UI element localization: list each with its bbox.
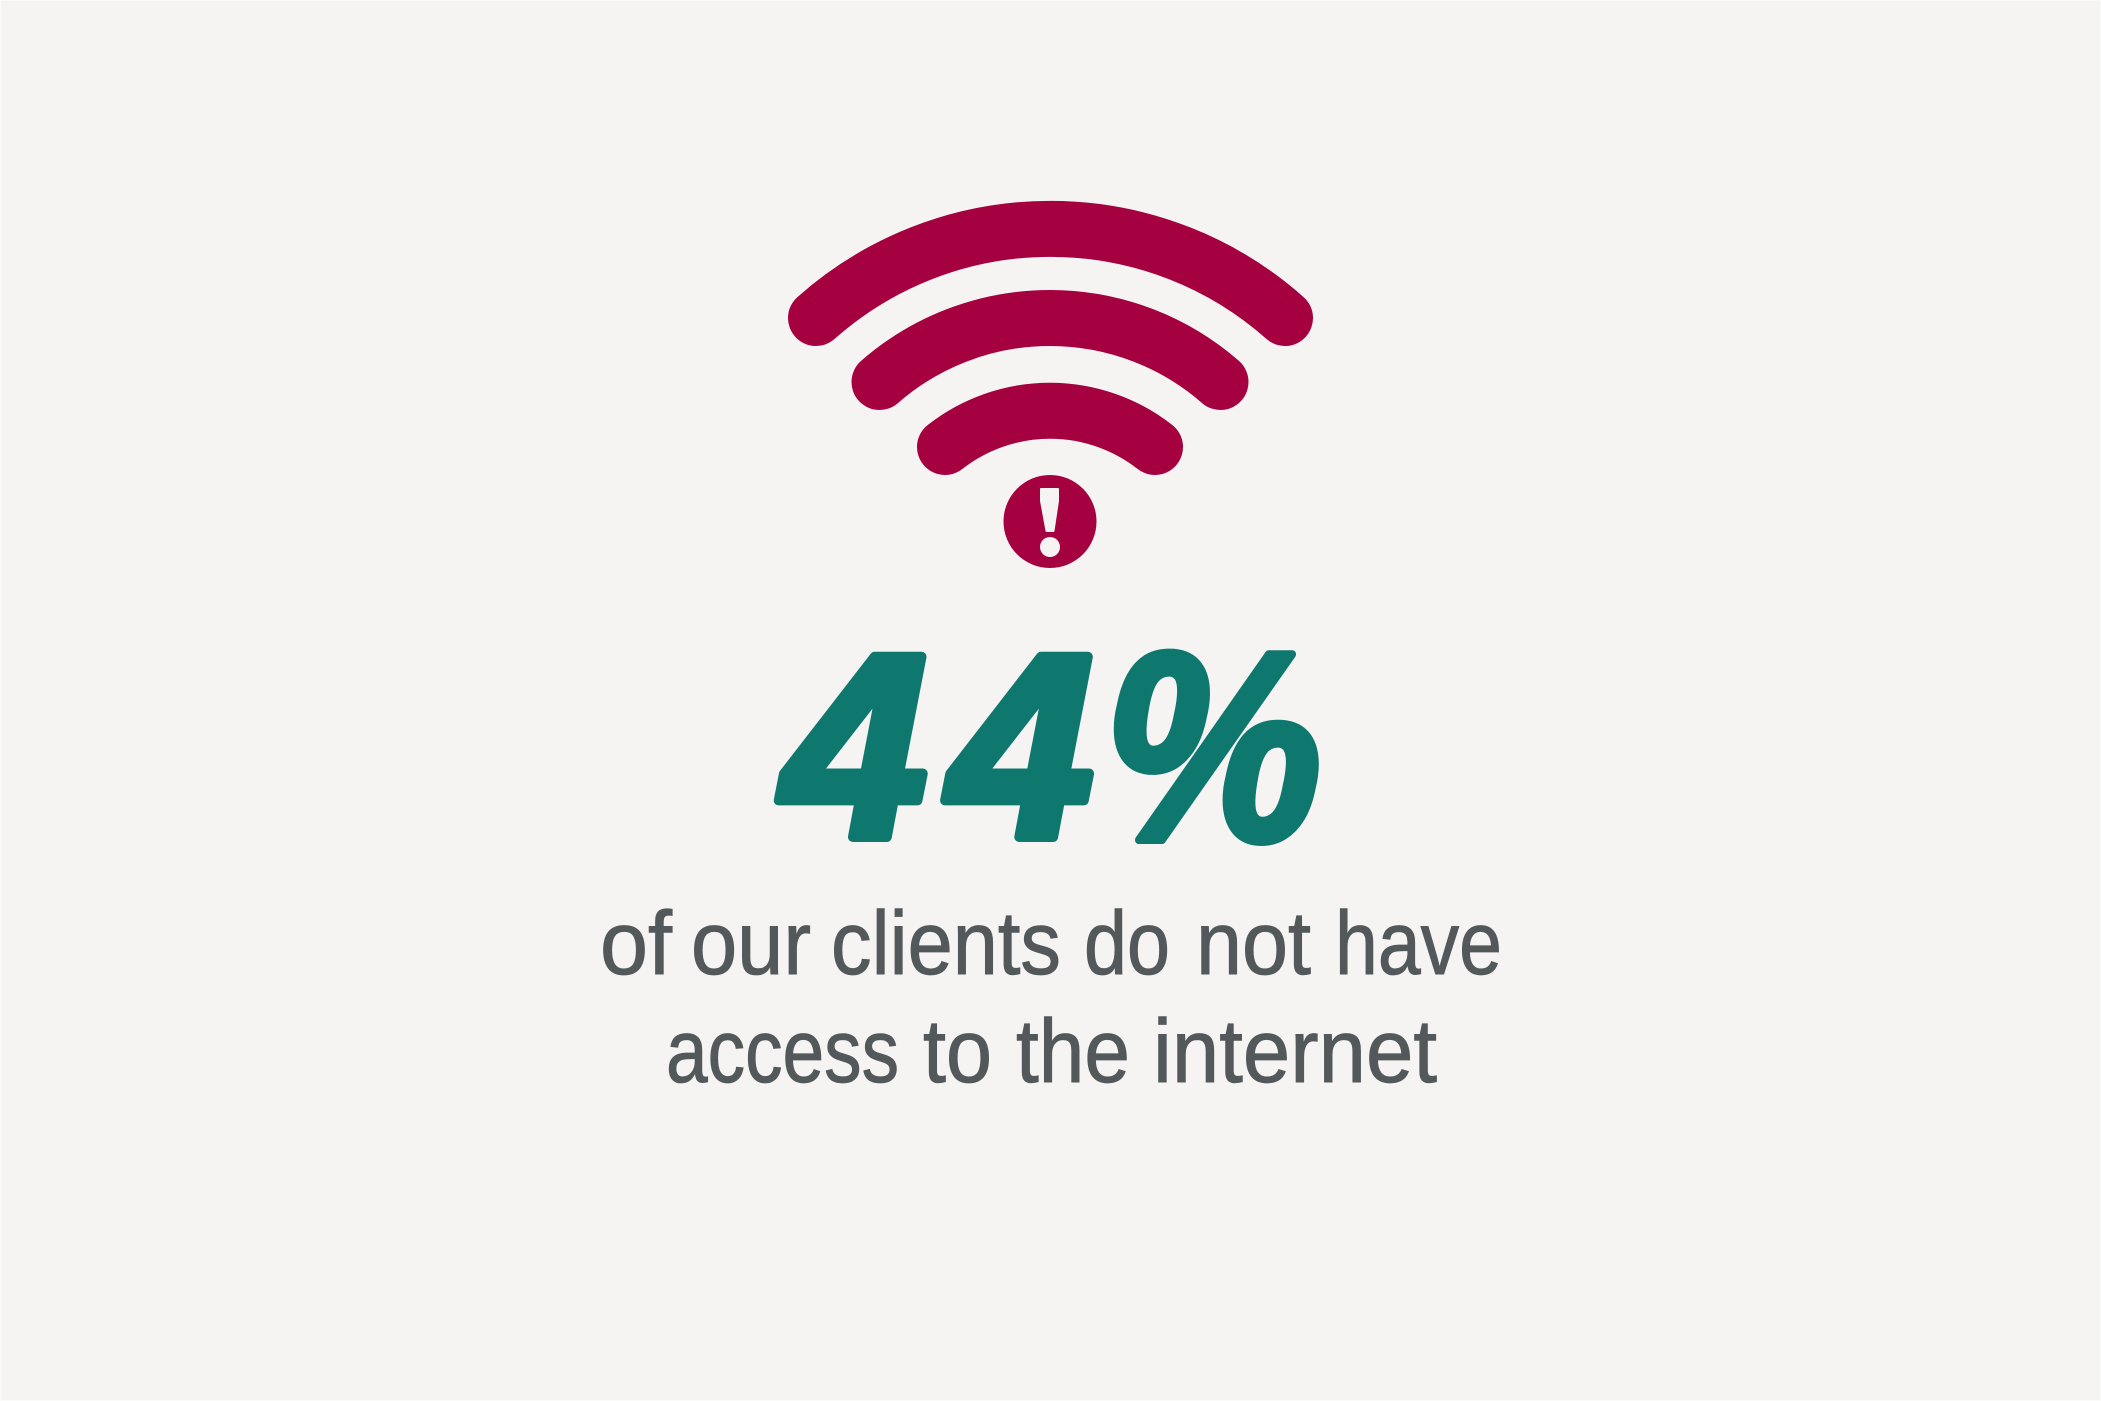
description text: to: [923, 1002, 992, 1102]
description text: of: [600, 894, 673, 994]
description text: not: [1196, 894, 1311, 994]
description text: do: [1084, 894, 1170, 994]
description text: access: [666, 1002, 899, 1102]
wifi arc: inner: [945, 411, 1155, 447]
statistic: 44%: %: [1104, 597, 1322, 898]
description text: [600, 894, 1502, 1102]
description text: our: [691, 894, 811, 994]
wifi arc: middle: [880, 318, 1220, 382]
description text: the: [1016, 1002, 1130, 1102]
icon: wifi signal with alert: [816, 229, 1285, 568]
wifi arc: outer: [816, 229, 1285, 318]
description text: have: [1335, 894, 1502, 994]
description text: internet: [1153, 1002, 1437, 1102]
icon: alert dot with exclamation mark: [1004, 475, 1096, 568]
description text: clients: [831, 894, 1061, 994]
statistic: 44%: 44: [775, 600, 1094, 893]
statistic: 44%: [775, 597, 1322, 898]
